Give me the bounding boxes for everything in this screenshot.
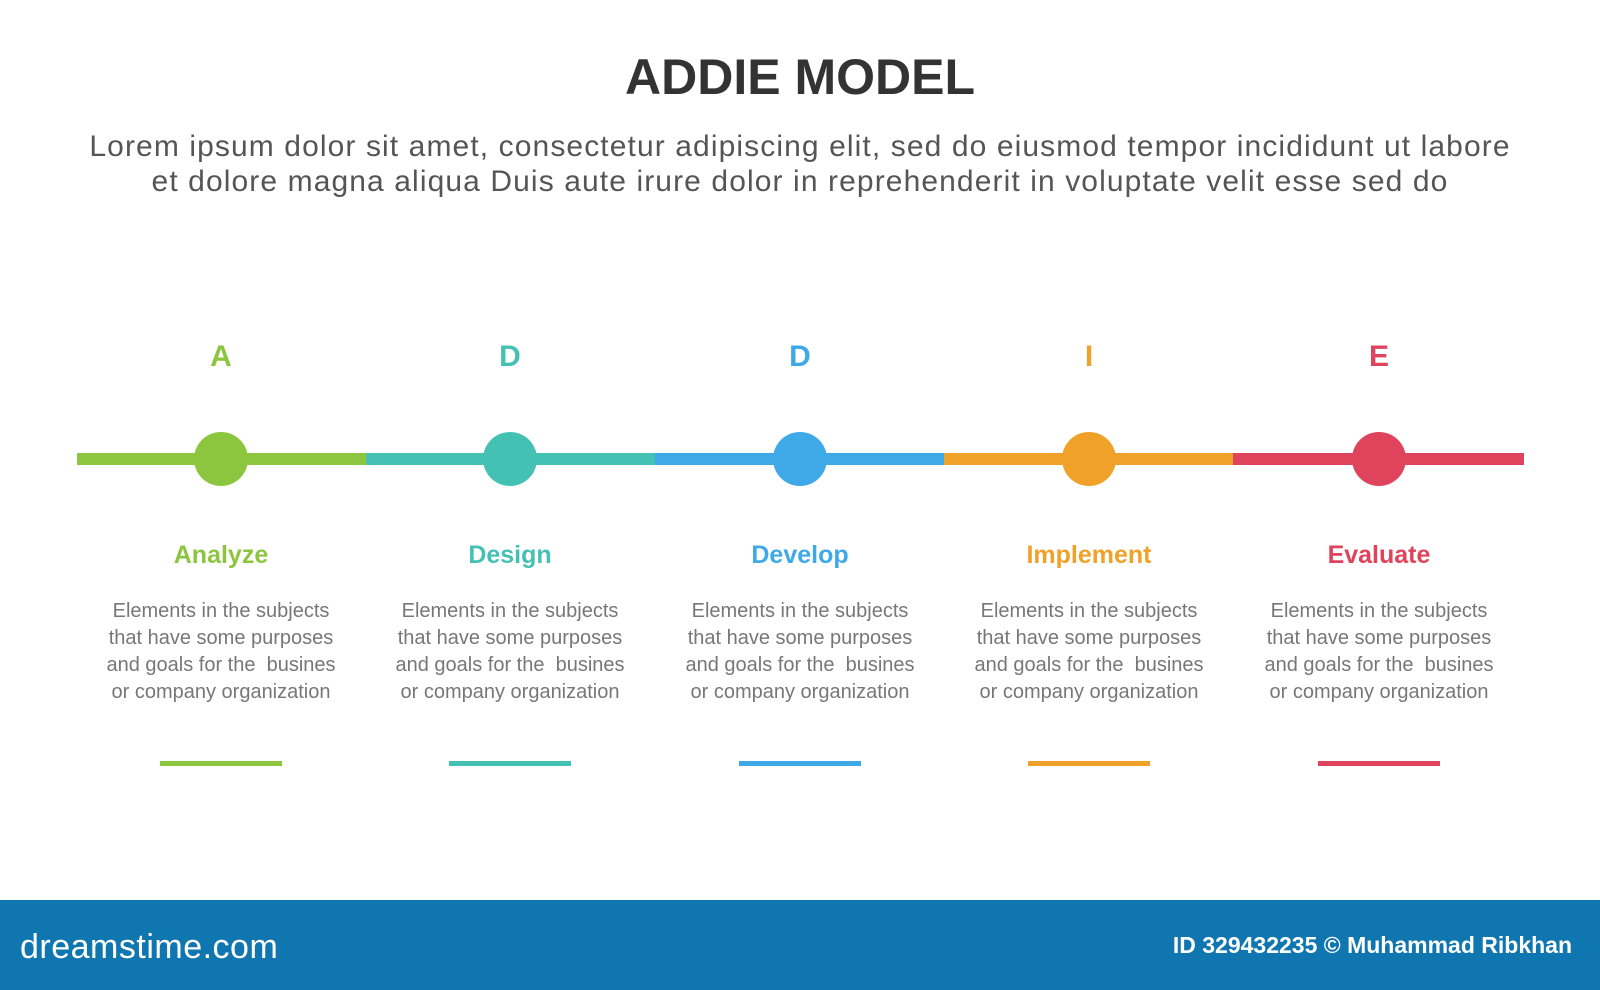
step: Evaluate bbox=[1264, 340, 1494, 766]
step: Analyze: and goals for the busines bbox=[106, 654, 336, 676]
step: Design: or company organization bbox=[400, 681, 620, 703]
step: Develop: and goals for the busines bbox=[685, 654, 915, 676]
step: Analyze: A bbox=[210, 340, 232, 373]
step: Implement: that have some purposes bbox=[977, 627, 1201, 649]
step: Evaluate: and goals for the busines bbox=[1264, 654, 1494, 676]
step: Design: Design bbox=[468, 541, 552, 569]
step: Analyze: that have some purposes bbox=[109, 627, 333, 649]
circle I bbox=[1062, 432, 1116, 486]
step: Evaluate: E bbox=[1369, 340, 1389, 373]
step: Develop: or company organization bbox=[690, 681, 910, 703]
circle E bbox=[1352, 432, 1406, 486]
footer logo: dreamstime.com bbox=[20, 928, 278, 966]
circle D2 bbox=[773, 432, 827, 486]
subtitle: Lorem ipsum dolor sit amet, consectetur adipiscing elit, sed do eiusmod tempor incididunt ut labore bbox=[89, 130, 1511, 163]
step: Design: that have some purposes bbox=[398, 627, 622, 649]
step: Develop: that have some purposes bbox=[688, 627, 912, 649]
step: Implement: or company organization bbox=[979, 681, 1198, 703]
step: Design: and goals for the busines bbox=[395, 654, 625, 676]
step: Analyze: or company organization bbox=[111, 681, 330, 703]
step: Develop: Develop bbox=[751, 541, 849, 569]
step: Evaluate: that have some purposes bbox=[1267, 627, 1491, 649]
step: Develop: Elements in the subjects bbox=[692, 600, 908, 622]
footer bar bbox=[0, 900, 1600, 990]
step: Analyze: Analyze bbox=[174, 541, 268, 569]
step: Analyze bbox=[106, 340, 336, 766]
step: Evaluate: Evaluate bbox=[1328, 541, 1430, 569]
step: Design: Elements in the subjects bbox=[402, 600, 618, 622]
footer credit: ID 329432235 © Muhammad Ribkhan bbox=[1173, 932, 1572, 958]
step: Implement: Elements in the subjects bbox=[981, 600, 1197, 622]
step: Design bbox=[395, 340, 625, 766]
step: Implement: Implement bbox=[1026, 541, 1152, 569]
step: Design: D bbox=[499, 340, 521, 373]
step: Implement: I bbox=[1085, 340, 1093, 373]
step: Implement bbox=[974, 340, 1204, 766]
circle A bbox=[194, 432, 248, 486]
title: ADDIE MODEL bbox=[625, 49, 975, 105]
subtitle bbox=[89, 130, 1511, 198]
step: Develop bbox=[685, 340, 915, 766]
step: Implement: and goals for the busines bbox=[974, 654, 1204, 676]
step: Evaluate: Elements in the subjects bbox=[1271, 600, 1487, 622]
step: Develop: D bbox=[789, 340, 811, 373]
step: Evaluate: or company organization bbox=[1269, 681, 1488, 703]
step: Analyze: Elements in the subjects bbox=[113, 600, 329, 622]
subtitle: et dolore magna aliqua Duis aute irure dolor in reprehenderit in voluptate velit esse sed do bbox=[152, 165, 1448, 198]
circle D bbox=[483, 432, 537, 486]
